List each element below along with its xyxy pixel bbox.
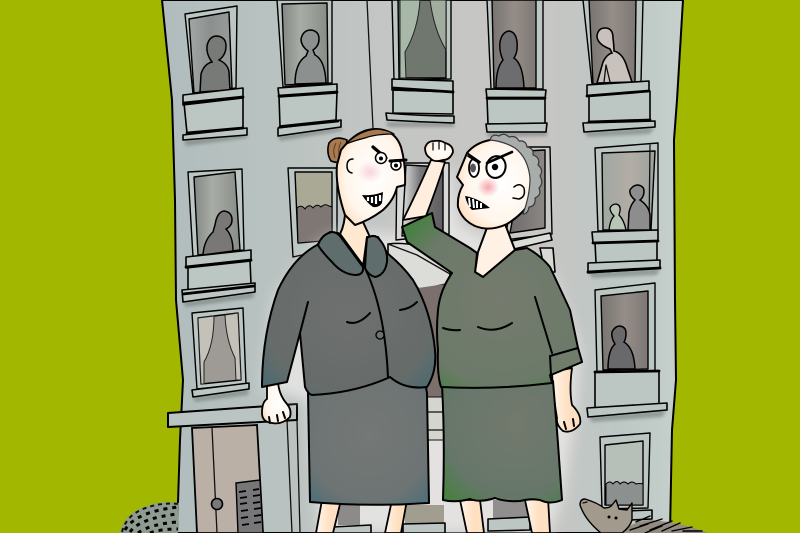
window row 1, column 2: [277, 0, 342, 141]
curtains: [400, 0, 420, 78]
hair: [346, 129, 394, 144]
canopy: [168, 404, 297, 427]
head: [457, 138, 537, 229]
cheek: [477, 177, 499, 197]
legs: [316, 500, 407, 533]
mouth: [465, 196, 490, 210]
silhouette: [496, 31, 524, 88]
silhouettes: [628, 185, 650, 230]
facade seams: [367, 0, 373, 128]
window fragments below the women: [333, 397, 530, 533]
window row 2, centre-left: [288, 168, 337, 257]
head: [337, 129, 405, 225]
silhouette: [200, 36, 230, 92]
lowered hand: [552, 368, 580, 432]
hand: [262, 382, 291, 423]
ear: [347, 159, 353, 173]
brown lower window between women: [418, 284, 446, 398]
mouth: [362, 192, 383, 207]
hedge bush, left: [120, 502, 179, 533]
button: [376, 331, 384, 339]
silhouette: [597, 28, 632, 83]
sleeve cuff: [550, 348, 582, 375]
legs: [460, 498, 550, 533]
eyes: [467, 152, 512, 180]
window row 1, column 4: [486, 0, 547, 137]
window row 1, column 3 with curtains: [386, 0, 454, 127]
hedgehog, right: [580, 499, 708, 533]
spines: [622, 520, 708, 533]
building facade: [162, 0, 683, 533]
white glow behind women: [262, 165, 580, 533]
window row 2, right: [588, 143, 660, 278]
neck: [475, 224, 515, 277]
window behind right woman: [505, 147, 555, 272]
intercom panel: [236, 480, 263, 533]
door knob: [212, 498, 222, 510]
pillar: [287, 420, 300, 533]
window row 2, left: [182, 169, 255, 307]
ear: [513, 185, 524, 199]
dress lines: [478, 323, 512, 330]
skirt: [442, 381, 562, 502]
raised forearm and fist: [403, 141, 453, 220]
window row 1, column 1: [183, 6, 247, 146]
window row 3, right: [587, 283, 667, 422]
curtain: [297, 205, 332, 243]
cheek: [357, 161, 383, 183]
jacket: [262, 232, 435, 395]
window behind raised arm: [388, 163, 450, 290]
apartment building: [162, 0, 683, 533]
hair bun: [328, 138, 347, 162]
skirt: [308, 376, 429, 505]
silhouette: [203, 211, 233, 255]
window row 3, left with curtains: [192, 308, 249, 402]
entrance canopy and door: [168, 404, 300, 533]
eyes: [373, 147, 406, 170]
right woman: [402, 134, 582, 533]
left woman: [262, 129, 435, 533]
silhouette: [608, 326, 635, 369]
curly grey hair: [490, 134, 542, 214]
neck: [340, 205, 376, 268]
door: [192, 425, 263, 533]
head: [580, 499, 632, 533]
collar: [318, 232, 363, 275]
curtains: [198, 316, 214, 384]
jacket lines: [365, 268, 388, 377]
window row 1, column 5: [583, 0, 655, 137]
dress top: [402, 213, 582, 388]
silhouette: [295, 30, 326, 84]
window row 4, right: [600, 433, 652, 520]
curtain: [606, 482, 643, 505]
